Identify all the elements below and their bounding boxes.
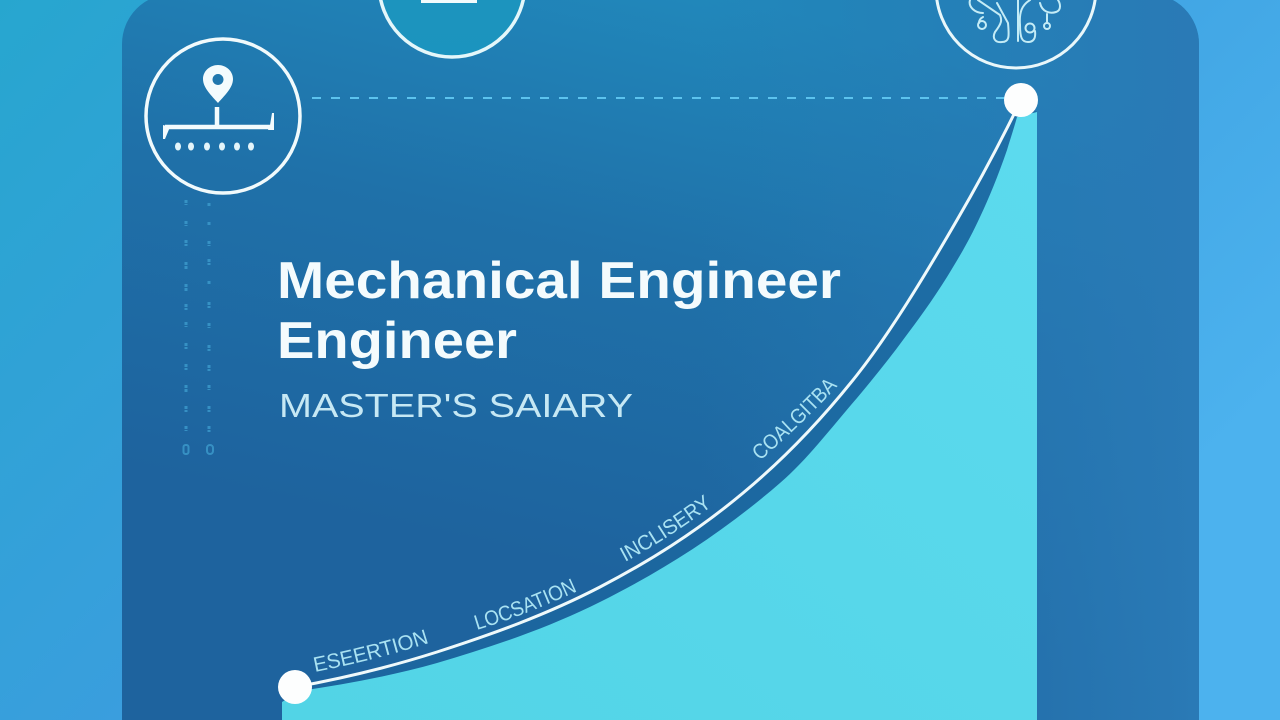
icon: circuit brain circle at top right: [936, 0, 1096, 68]
title: Engineer: [277, 312, 517, 370]
curve labels: [314, 380, 838, 672]
curve shadow band: [282, 100, 1037, 720]
start point: [278, 670, 312, 704]
curve labels: COALGITBA: [753, 380, 838, 458]
chart: area under salary curve: [278, 83, 1038, 720]
title: [277, 252, 841, 370]
connector: dashed line: [312, 97, 1008, 99]
curve labels: LOCSATION: [474, 578, 576, 630]
end point: [1004, 83, 1038, 117]
data column ticks: [184, 200, 213, 454]
icon: location pin on beam: [146, 39, 300, 193]
icon: document circle at top: [379, 0, 525, 57]
area fill: [282, 112, 1037, 720]
curve labels: INCLISERY: [620, 494, 708, 562]
curve labels: ESEERTION: [314, 630, 428, 672]
curve line: [295, 100, 1021, 687]
title: Mechanical Engineer: [277, 252, 841, 310]
subtitle: MASTER'S SAIARY: [279, 387, 633, 424]
